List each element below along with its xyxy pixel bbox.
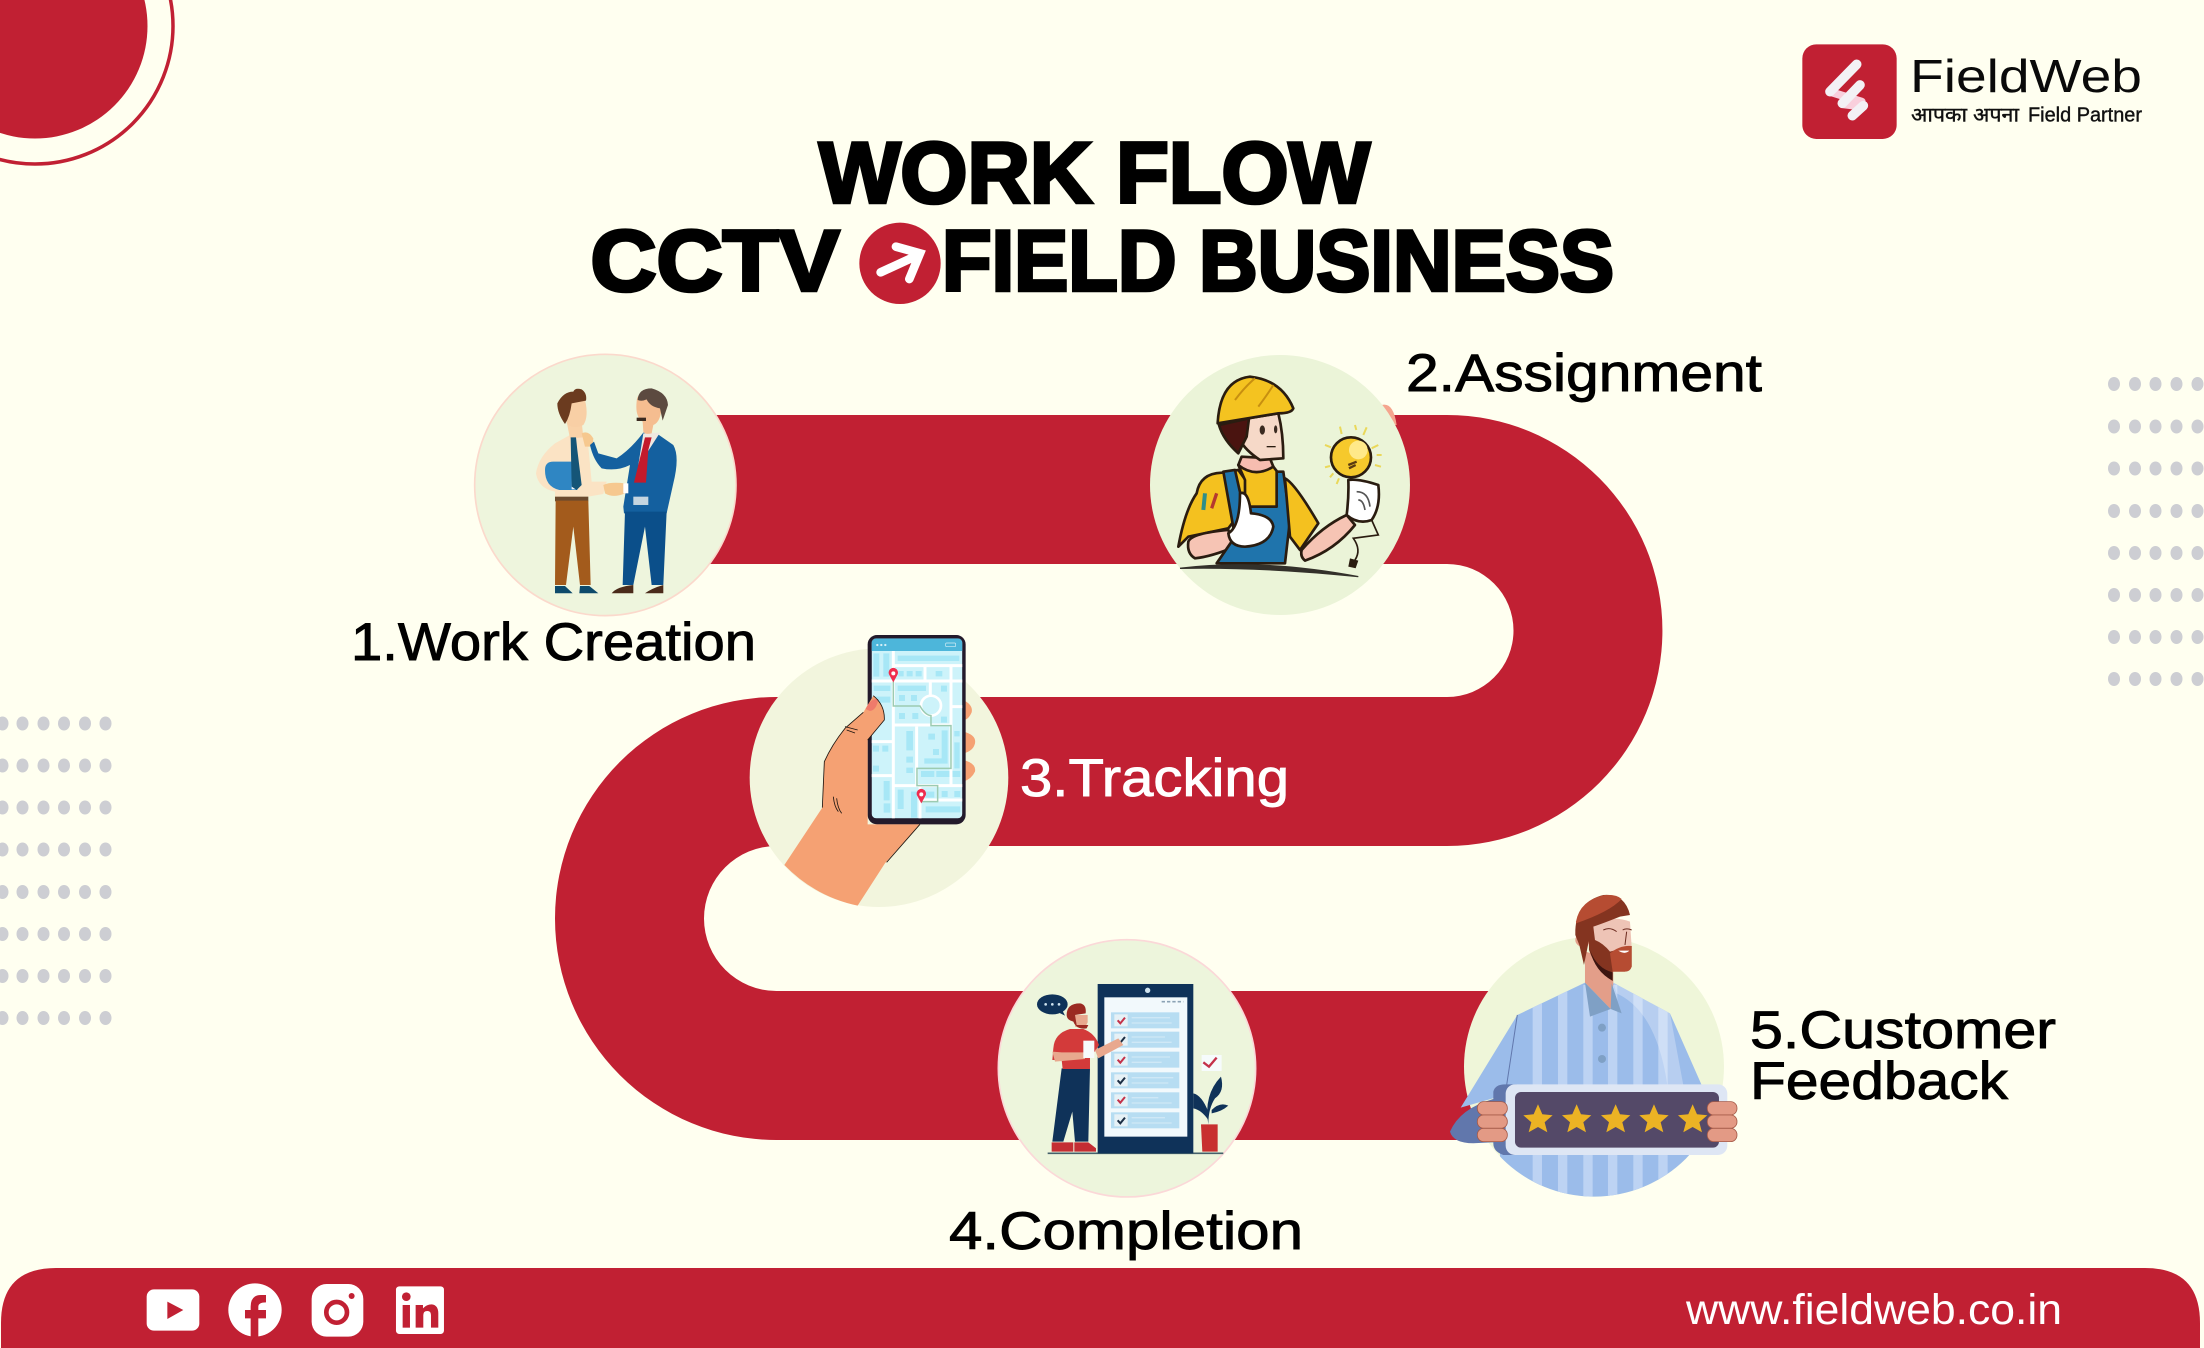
icon: youtube xyxy=(147,1289,199,1331)
step 2: worker with light bulb xyxy=(1150,355,1410,615)
step 4: man with checklist on device xyxy=(998,940,1256,1197)
step 3 label: 3.Tracking xyxy=(1020,749,1289,808)
logo tagline: Field Partner xyxy=(2028,104,2142,126)
logo icon xyxy=(1802,44,1897,139)
logo tagline xyxy=(1911,104,2142,126)
logo wordmark: FieldWeb xyxy=(1910,50,2142,102)
step 5 label: 5.Customer xyxy=(1750,1001,2056,1060)
icon: instagram xyxy=(312,1284,363,1337)
serpentine red ribbon path xyxy=(555,415,1662,1140)
social icons xyxy=(147,1283,444,1337)
icon: facebook xyxy=(228,1283,282,1337)
title xyxy=(590,126,1614,310)
step 1 label: 1.Work Creation xyxy=(351,613,756,672)
dots right xyxy=(2108,377,2204,686)
title: CCTV xyxy=(590,214,840,310)
step 2 label: 2.Assignment xyxy=(1406,344,1762,403)
logo tagline: आपका अपना xyxy=(1911,104,2020,126)
icon: linkedin xyxy=(396,1286,444,1334)
dots left xyxy=(0,716,112,1025)
title: WORK FLOW xyxy=(819,126,1371,222)
step 5: customer holding five star rating xyxy=(1450,895,1737,1198)
step 3: hand holding phone with map xyxy=(750,635,1008,907)
step 4 label: 4.Completion xyxy=(949,1202,1303,1261)
icon: arrow in circle xyxy=(859,223,941,304)
title: FIELD BUSINESS xyxy=(942,214,1614,310)
footer bar xyxy=(1,1268,2200,1348)
step 5 label: Feedback xyxy=(1750,1052,2009,1111)
logo: FieldWeb xyxy=(1802,44,2142,139)
step 1: two men shaking hands xyxy=(475,354,736,616)
website url: www.fieldweb.co.in xyxy=(1685,1286,2062,1334)
step 5 label xyxy=(1750,1001,2056,1111)
decorative corner circle xyxy=(0,0,173,164)
